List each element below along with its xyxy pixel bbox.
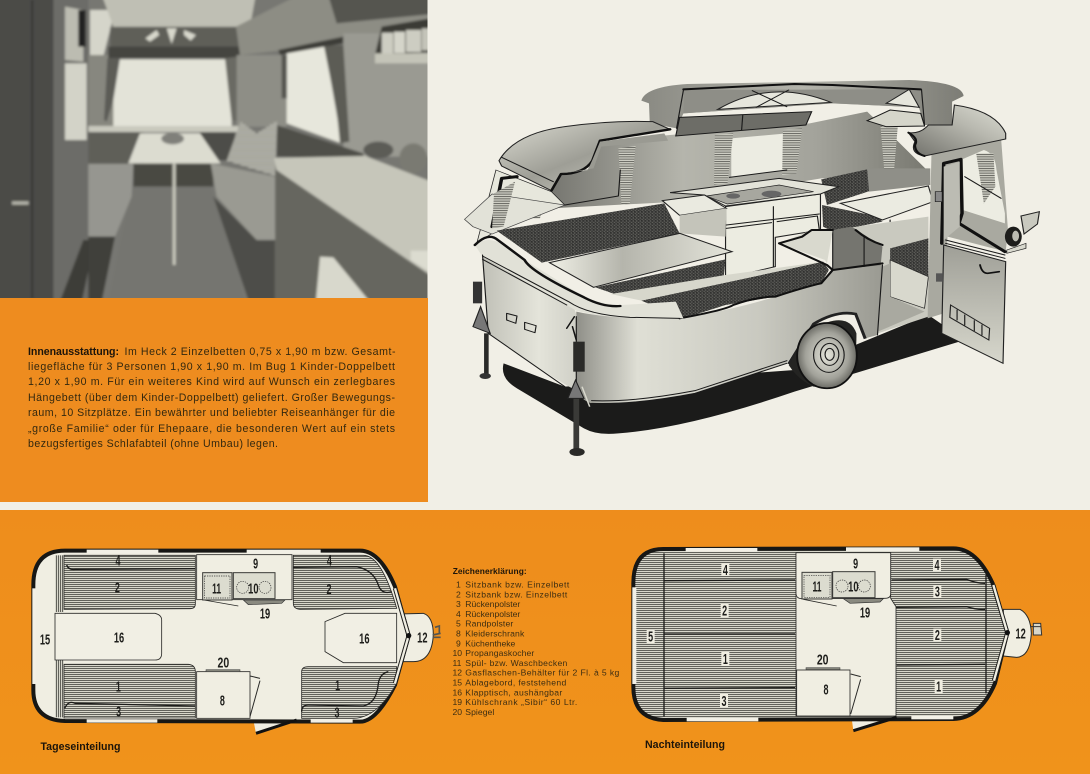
number labels: 9: [253, 556, 258, 573]
door window opening: [962, 150, 1005, 223]
number labels: 15: [40, 631, 50, 648]
number labels: 11: [812, 579, 821, 596]
heading: Nachteinteilung: Nachteinteilung: [645, 739, 725, 751]
number labels: 4: [327, 553, 332, 570]
entrance door: [256, 720, 297, 733]
text block: Innenausstattung: raum, 10 Sitzplätze. Ein bewährter und beliebter Reiseanhänger für die: [28, 407, 395, 419]
rear panel: [483, 255, 576, 390]
number labels: 20: [817, 652, 828, 669]
number labels: [647, 555, 1026, 710]
number labels: 20: [217, 654, 229, 671]
text block: Innenausstattung: bezugsfertiges Schlafabteil (ohne Umbau) legen.: [28, 438, 278, 450]
wall window: [528, 127, 898, 218]
number labels: 10: [848, 579, 858, 596]
number labels: 11: [212, 580, 221, 597]
bed divider lines: [664, 553, 986, 717]
floor plan: night layout: [632, 547, 1042, 731]
photo: shelf with cards: [374, 18, 428, 64]
number labels: 19: [860, 605, 870, 622]
front folding table: [840, 186, 933, 247]
number labels: 10: [248, 580, 258, 597]
number labels: 12: [417, 630, 427, 647]
text block: Innenausstattung: Hängebett (über dem Kinder-Doppelbett) geliefert. Großer Bewegungs-: [28, 392, 395, 404]
legend: Zeichenerklärung: Rückenpolster: [465, 609, 520, 619]
number labels: 9: [853, 555, 858, 572]
torn cut line: [680, 263, 882, 318]
legend: Zeichenerklärung: Klapptisch, aushängbar: [465, 687, 562, 697]
legend: Zeichenerklärung: 20: [452, 707, 462, 717]
legend: Zeichenerklärung: 4: [456, 609, 461, 619]
legend: Zeichenerklärung: Spül- bzw. Waschbecken: [465, 658, 568, 668]
legend: Zeichenerklärung: Ablagebord, feststehend: [465, 678, 567, 688]
caravan outline: [633, 548, 1007, 720]
legend: Zeichenerklärung: Sitzbank bzw. Einzelbett: [465, 589, 568, 599]
number labels: 2: [722, 603, 727, 620]
folding table rear: [55, 613, 162, 660]
windows: [32, 550, 353, 723]
legend: Zeichenerklärung: 5: [456, 619, 461, 629]
photo: kitchen counter: [274, 140, 428, 298]
legend: Zeichenerklärung: 2: [456, 589, 461, 599]
rear shelf and window: [465, 170, 620, 243]
bench top rear: [64, 555, 195, 609]
text block: Innenausstattung: [28, 346, 396, 450]
photo: wall lamps: [145, 28, 196, 44]
rear vertical strips: [55, 555, 64, 717]
number labels: 2: [935, 627, 940, 644]
number labels: 2: [115, 580, 120, 597]
kitchen counter: [796, 553, 891, 606]
heading: Tageseinteilung: Tageseinteilung: [40, 741, 120, 753]
legend: Zeichenerklärung: Gasflaschen-Behälter für 2 Fl. à 5 kg: [465, 668, 620, 678]
legend: Zeichenerklärung: 8: [456, 628, 461, 638]
cut edge by kitchen: [779, 230, 833, 263]
legend: Zeichenerklärung: 9: [456, 638, 461, 648]
tow bar and gas bottle compartment: [398, 613, 441, 662]
entry interior: [833, 217, 928, 333]
photo: striped pillow: [227, 121, 277, 176]
legend: Zeichenerklärung: [452, 566, 620, 717]
number labels: 16: [359, 630, 369, 647]
number labels: [40, 553, 427, 722]
photo: side window with curtain: [282, 45, 349, 143]
number labels: 16: [114, 629, 124, 646]
legend: Zeichenerklärung: 15: [452, 678, 462, 688]
number labels: 3: [116, 704, 121, 721]
photo: table: [128, 133, 221, 265]
number labels: 8: [823, 682, 828, 699]
number labels: 1: [936, 679, 941, 696]
number labels: 2: [326, 581, 331, 598]
rear rim: [475, 237, 882, 404]
legend: Zeichenerklärung: 12: [452, 668, 462, 678]
number labels: 12: [1015, 625, 1026, 642]
text block: Innenausstattung: Innenausstattung:: [28, 346, 119, 358]
stabiliser legs: [473, 307, 590, 456]
caravan side wall: [576, 265, 882, 404]
number labels: 1: [723, 651, 728, 668]
number labels: 19: [260, 605, 270, 622]
door frame: [928, 138, 1008, 318]
hitch: [1005, 212, 1039, 253]
entrance door: [853, 717, 897, 731]
ground shadow: [503, 315, 965, 434]
entrance door swing wedge: [253, 720, 297, 733]
rear lamps and vents: [473, 282, 585, 372]
front chevron: [395, 588, 411, 683]
legend: Zeichenerklärung: 16: [452, 687, 462, 697]
legend: Zeichenerklärung: Rückenpolster: [465, 599, 520, 609]
number labels: 1: [116, 679, 121, 696]
open door: [935, 159, 1006, 363]
number labels: 4: [934, 557, 940, 574]
panel: interior photograph: [0, 0, 440, 310]
legend: Zeichenerklärung: Sitzbank bzw. Einzelbett: [465, 580, 570, 590]
legend: Zeichenerklärung: Spiegel: [465, 707, 494, 717]
number labels: 3: [935, 584, 940, 601]
windows: [632, 547, 953, 721]
number labels: 5: [648, 629, 653, 646]
far bench upholstery: [821, 168, 930, 232]
wheel: [789, 320, 857, 388]
under bed upholstery: [595, 259, 726, 294]
wardrobe: [197, 670, 260, 718]
legend: Zeichenerklärung: 10: [452, 648, 462, 658]
photo: floor: [107, 187, 248, 310]
seat backrest: [497, 203, 680, 263]
central aisle: [796, 553, 896, 716]
entrance door swing wedge: [852, 717, 897, 731]
photo: left bench: [88, 164, 133, 237]
legend: Zeichenerklärung: 11: [452, 658, 462, 668]
photo: wardrobe door at left: [0, 0, 54, 298]
illustration: cutaway caravan: [465, 80, 1039, 456]
legend: Zeichenerklärung: 19: [452, 697, 462, 707]
caravan outline: [33, 551, 409, 722]
interior back wall: [550, 112, 930, 208]
foreground bench: [611, 230, 882, 318]
bench bottom rear: [64, 664, 195, 718]
folding table front: [325, 613, 397, 663]
bench bottom front: [302, 667, 397, 718]
number labels: 4: [115, 553, 121, 570]
panel: orange text panel: [0, 298, 428, 502]
legend: Zeichenerklärung: Küchentheke: [465, 638, 516, 648]
text block: Innenausstattung: „große Familie“ oder für Ehepaare, die besonderen Wert auf ein stets: [28, 423, 395, 435]
legend: Zeichenerklärung: Propangaskocher: [465, 648, 534, 658]
left roof shell: [499, 121, 670, 191]
legend: Zeichenerklärung: Randpolster: [465, 619, 513, 629]
number labels: 4: [723, 562, 728, 579]
kitchen unit: [662, 178, 838, 278]
roof section: [641, 80, 964, 136]
wardrobe: [797, 668, 861, 716]
legend: Zeichenerklärung: Kühlschrank „Sibir“ 60 Ltr.: [465, 697, 577, 707]
number labels: 1: [335, 678, 340, 695]
tow bar and gas bottle compartment: [1003, 609, 1042, 657]
legend: Zeichenerklärung: 1: [456, 580, 461, 590]
bench top front: [293, 555, 397, 609]
number labels: 3: [721, 693, 726, 710]
front roof shell: [908, 105, 1006, 156]
panel: orange floor plan band: [0, 510, 1090, 774]
photo: rear window with curtains: [104, 57, 237, 127]
legend: Zeichenerklärung: 3: [456, 599, 461, 609]
text block: Innenausstattung: 1,20 x 1,90 m. Für ein weiteres Kind wird auf Wunsch ein zerlegbares: [28, 376, 395, 388]
legend: Zeichenerklärung: Kleiderschrank: [465, 628, 525, 638]
rear bed surface: [550, 233, 732, 287]
photo: right bench: [211, 163, 275, 240]
text block: Innenausstattung: Im Heck 2 Einzelbetten 0,75 x 1,90 m bzw. Gesamt-: [124, 346, 396, 358]
text block: Innenausstattung: liegefläche für 3 Personen 1,90 x 1,90 m. Im Bug 1 Kinder-Doppelbett: [28, 361, 395, 373]
kitchen counter: [197, 555, 292, 606]
legend: Zeichenerklärung: Zeichenerklärung:: [453, 566, 527, 576]
floor plan: day layout: [32, 550, 441, 733]
number labels: 8: [220, 692, 225, 709]
wheel arch: [789, 313, 865, 364]
number labels: 3: [334, 705, 339, 722]
front chevron: [993, 585, 1010, 681]
